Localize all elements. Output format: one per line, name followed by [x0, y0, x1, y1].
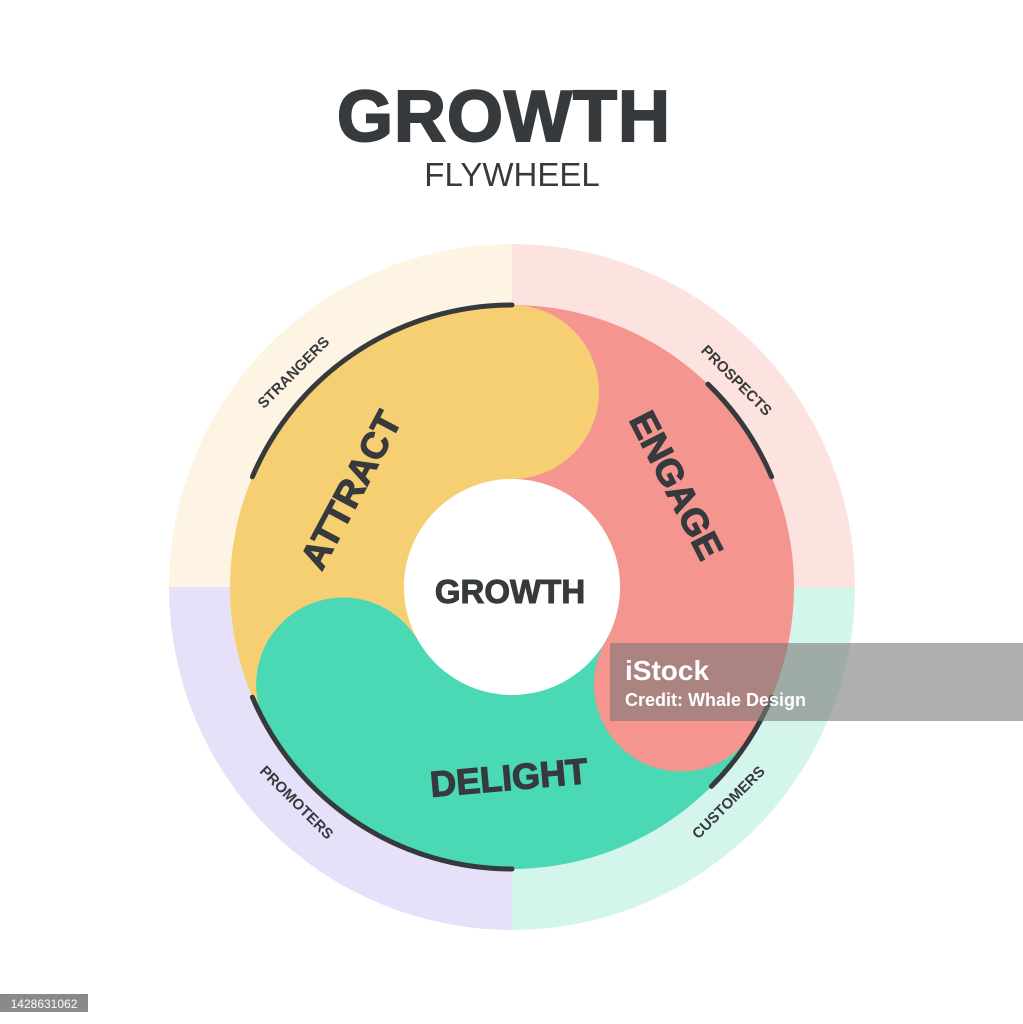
watermark: Credit: Whale Design: [625, 690, 806, 710]
outer labels: CUSTOMERS: [689, 763, 769, 843]
outer labels: [255, 334, 775, 843]
outer labels: PROMOTERS: [256, 763, 336, 843]
watermark: iStock: [625, 655, 709, 686]
segment labels: ATTRACT: [292, 404, 410, 576]
title: [337, 77, 671, 193]
center label: GROWTH: [435, 573, 585, 610]
segment labels: ENGAGE: [621, 405, 731, 566]
dark arcs: [252, 305, 772, 869]
image id: 1428631062: [11, 997, 78, 1011]
segment labels: DELIGHT: [428, 750, 589, 805]
outer ring quadrants: [169, 244, 855, 930]
outer labels: PROSPECTS: [697, 342, 775, 420]
watermark: [610, 643, 1023, 721]
segment labels: [292, 404, 731, 805]
title: FLYWHEEL: [424, 156, 600, 193]
flywheel segments: [230, 305, 794, 869]
image id: [0, 994, 88, 1012]
title: GROWTH: [337, 77, 671, 157]
outer labels: STRANGERS: [255, 334, 333, 412]
